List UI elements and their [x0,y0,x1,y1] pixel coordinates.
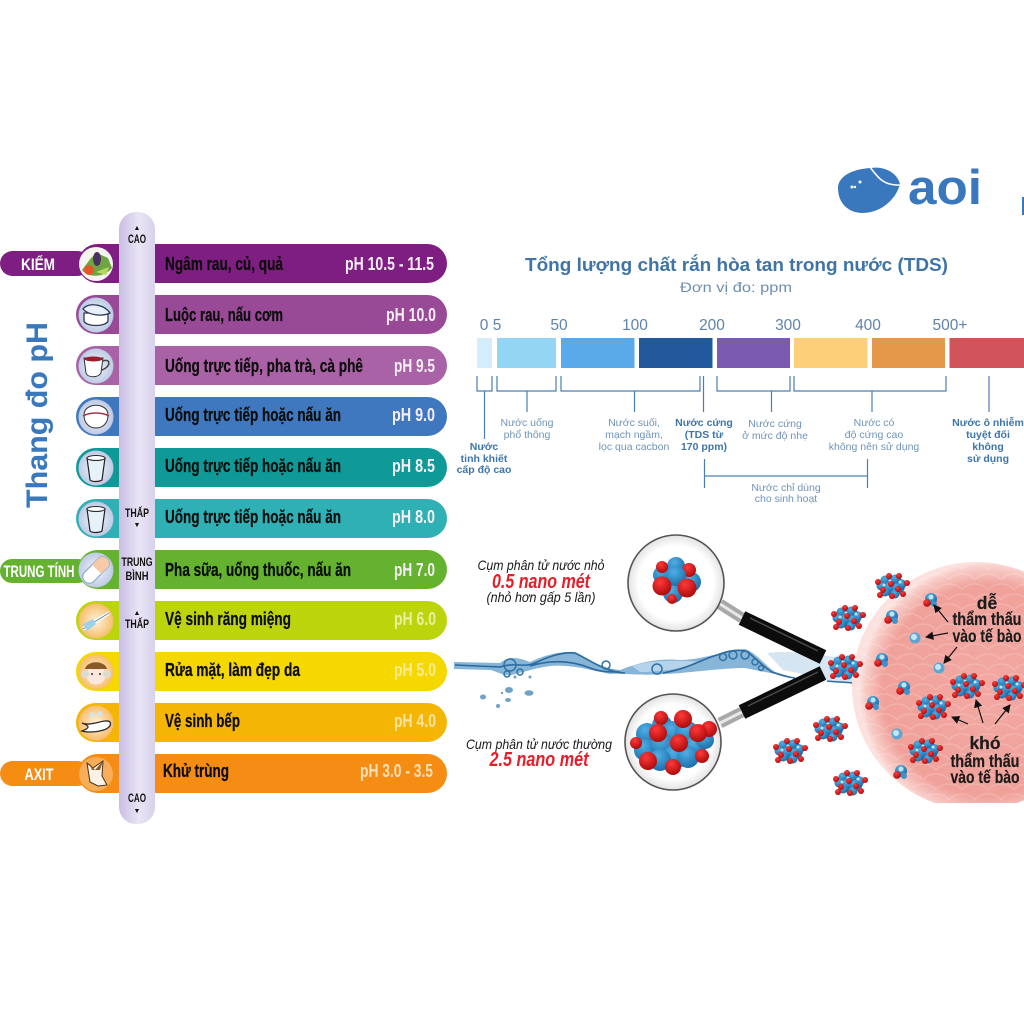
row: pH 3.0 - 3.5: pH 3.0 - 3.5 [360,761,433,781]
magnifier: small cluster [628,535,823,657]
row: pH 9.0: Uống trực tiếp hoặc nấu ăn [165,405,341,425]
label: AXIT [0,761,90,786]
row: pH 10.0: pH 10.0 [386,305,436,325]
row: pH 9.5 [76,346,447,385]
TDS scale numbers: 100 [622,317,648,334]
tube labels: ▼ [134,522,140,529]
label: AXIT: AXIT [24,765,54,784]
logo: aoi: aoi [908,161,982,215]
label: TRUNG TÍNH: TRUNG TÍNH [4,562,74,581]
TDS label: drinking: phổ thông [504,429,551,441]
large molecule clusters [773,573,1024,796]
icon: pot [78,298,114,332]
row: pH 7.0 [78,550,447,589]
row: pH 9.0: pH 9.0 [392,405,435,425]
row: pH 10.5 - 11.5: pH 10.5 - 11.5 [345,254,434,274]
row: pH 8.0 [76,499,447,538]
logo: aoi [838,161,1024,215]
magnifier: large cluster [625,672,823,790]
caption: small cluster: 0.5 nano mét [492,571,591,593]
row: pH 8.0: pH 8.0 [392,507,435,527]
TDS label: ultrapure: tinh khiết [461,453,508,465]
TDS scale numbers: 200 [699,317,725,334]
row: pH 4.0: Vệ sinh bếp [165,711,240,731]
TDS label: household only: cho sinh hoạt [755,493,817,505]
icon: sponge and dish [78,706,114,740]
vertical title: Thang đo pH: Thang đo pH [21,322,54,508]
tube labels: TRUNG [122,557,153,569]
row: pH 8.5: pH 8.5 [392,456,435,476]
row: pH 4.0 [76,703,447,742]
icon: capsule [78,552,114,588]
tube labels: CAO [128,234,146,246]
TDS label: hard water: (TDS từ [685,429,724,441]
TDS label: high hardness: độ cứng cao [845,429,903,441]
caption: small cluster: Cụm phân tử nước nhỏ [478,557,605,573]
TDS label: polluted: tuyệt đối [966,429,1010,441]
icon: cup [78,348,114,384]
row: pH 6.0 [76,601,447,640]
TDS label: polluted: Nước ô nhiễm [952,416,1024,429]
arrows [926,605,1010,724]
row: pH 10.0: Luộc rau, nấu cơm [165,305,283,325]
row: pH 3.0 - 3.5: Khử trùng [163,761,229,781]
icon: toothbrush [78,604,114,638]
TDS scale numbers: 300 [775,317,801,334]
cell text: hard to permeate: khó [969,733,1001,753]
tube labels [122,225,153,815]
row: pH 10.0 [76,295,447,334]
TDS scale numbers: 50 [550,317,568,334]
tube labels: BÌNH [126,570,148,583]
icon: face with hat [78,654,114,690]
tube labels: CAO [128,793,146,805]
TDS scale numbers [480,317,967,334]
caption: regular cluster: Cụm phân tử nước thường [466,736,612,752]
TDS label: drinking: Nước uống [500,417,554,429]
icon: germ devil [79,757,113,791]
row: pH 9.5: pH 9.5 [394,356,435,376]
row: pH 8.5 [76,448,447,487]
TDS label: spring water: Nước suối, [608,417,660,429]
cell sphere [852,562,1024,810]
icon: bowl [78,400,114,434]
TDS scale numbers: 0 [480,317,489,334]
TDS label: spring water: mạch ngầm, [605,429,663,441]
row: pH 7.0: pH 7.0 [394,560,435,580]
row: pH 9.5: Uống trực tiếp, pha trà, cà phê [165,356,363,376]
TDS scale numbers: 500+ [933,317,967,334]
tube labels: ▲ [134,610,140,617]
TDS label: mild hardness: Nước cứng [748,418,802,430]
tube labels: THẤP [125,618,149,631]
TDS label: hard water: Nước cứng [675,417,733,429]
TDS scale numbers: 400 [855,317,881,334]
TDS label: polluted: không [972,441,1004,453]
tube labels: THẤP [125,507,149,520]
row: pH 6.0: Vệ sinh răng miệng [165,609,291,629]
cell text: hard to permeate [950,733,1020,787]
TDS label: polluted: sử dụng [967,453,1009,465]
TDS heading: Tổng lượng chất rắn hòa tan trong nước (TDS) [525,254,948,275]
row: pH 4.0: pH 4.0 [394,711,436,731]
row: pH 5.0: Rửa mặt, làm đẹp da [165,660,301,680]
caption: regular cluster [466,736,612,771]
row: pH 8.0: Uống trực tiếp hoặc nấu ăn [165,507,341,527]
row: pH 5.0: pH 5.0 [394,660,436,680]
TDS label: mild hardness: ở mức độ nhẹ [742,430,808,442]
caption: regular cluster: 2.5 nano mét [489,749,590,771]
row: pH 10.5 - 11.5: Ngâm rau, củ, quả [165,254,284,274]
icon: vegetables [79,247,113,281]
caption: small cluster [478,557,605,605]
row: pH 5.0 [76,652,447,691]
cell text: easy to permeate [952,592,1022,646]
icon: glass [78,502,114,536]
TDS brackets [477,376,989,488]
caption: small cluster: (nhỏ hơn gấp 5 lần) [486,589,596,605]
pH scale tube [119,212,155,824]
water splash [454,649,855,708]
TDS label: hard water: 170 ppm) [681,441,727,453]
row: pH 10.5 - 11.5 [78,244,447,283]
TDS label: high hardness: không nên sử dụng [829,441,919,453]
TDS label: spring water: lọc qua cacbon [599,441,669,453]
icon: glass [78,450,114,486]
row: pH 6.0: pH 6.0 [394,609,436,629]
TDS label: household only: Nước chỉ dùng [751,482,821,494]
small molecule clusters [865,593,944,779]
cell text: easy to permeate: dễ [977,592,997,613]
row: pH 8.5: Uống trực tiếp hoặc nấu ăn [165,456,341,476]
label: KIỂM: KIỂM [21,255,55,274]
row: pH 9.0 [76,397,447,436]
TDS scale numbers: 5 [493,317,501,334]
row: pH 3.0 - 3.5 [78,754,447,793]
TDS colour bar [477,338,1024,368]
TDS label: ultrapure: cấp độ cao [457,464,511,476]
TDS unit: Đơn vị đo: ppm [680,279,792,295]
tube labels: ▲ [134,225,140,232]
row: pH 7.0: Pha sữa, uống thuốc, nấu ăn [165,560,351,580]
tube labels: ▼ [134,808,140,815]
TDS label: high hardness: Nước có [854,417,895,429]
TDS label: ultrapure: Nước [470,441,498,453]
label: TRUNG TÍNH [0,559,90,583]
label: KIỂM [0,251,90,276]
